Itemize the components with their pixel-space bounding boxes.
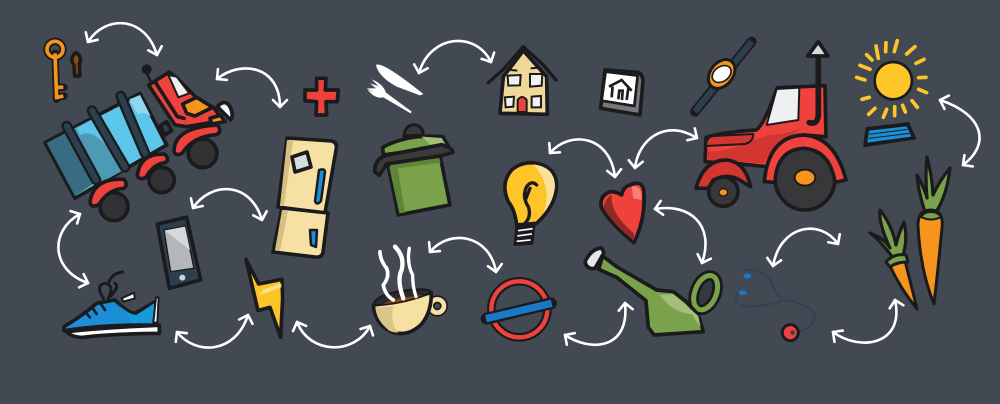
icon: keys [47, 41, 80, 99]
arrow: stethoscope to small carrot [833, 300, 896, 343]
tractor exhaust [809, 55, 818, 123]
truck connector [160, 122, 172, 135]
icon: watch [695, 42, 752, 112]
can spout head [585, 248, 604, 269]
pot knob [404, 125, 423, 136]
arrow: phone to fridge [193, 189, 262, 220]
truck cab [145, 68, 151, 82]
arrow: knife to house [419, 41, 491, 73]
tractor window [767, 88, 799, 125]
truck container [45, 93, 167, 198]
icon: stethoscope [736, 270, 815, 341]
arrow: heart to tractor [635, 130, 697, 168]
arrow: truck to plus [217, 68, 280, 107]
icon: plus cross [305, 78, 338, 115]
tractor fenders [764, 135, 846, 182]
icon: sneaker [64, 272, 159, 337]
pot lid [383, 136, 448, 155]
can body [599, 256, 703, 335]
icon: watering can [585, 248, 722, 335]
cup handle [431, 299, 444, 313]
icon: fridge [273, 138, 336, 257]
tractor body [705, 86, 826, 167]
icon: small carrot [870, 210, 917, 309]
icon: large carrot [917, 157, 950, 304]
tractor front wheel [709, 177, 738, 206]
arrow: stethoscope to carrot [773, 229, 838, 266]
arrow: heart to watering can [655, 208, 705, 263]
truck wheels [100, 139, 217, 221]
tractor rear wheel [775, 147, 835, 210]
cup body [373, 293, 431, 334]
solar panel [864, 123, 915, 146]
icon: smart home badge [601, 70, 643, 115]
icon: sun [857, 41, 927, 146]
pot rim [375, 145, 453, 175]
arrow: sneaker to bolt [177, 315, 248, 348]
icon: house [488, 47, 556, 114]
icon: green pot [375, 125, 453, 215]
arrow: sun to carrots [940, 100, 980, 165]
tractor hood panel [706, 134, 753, 146]
arrow: bolt to cup [297, 322, 370, 347]
coffee [373, 289, 431, 305]
truck fenders [90, 125, 220, 206]
pot body [388, 155, 450, 215]
arrow: truck to sneaker [58, 214, 88, 283]
icon: phone [157, 217, 201, 288]
arrow: keys to truck [88, 23, 157, 55]
arrow: bulb to heart [550, 139, 615, 177]
icon: lightning bolt [246, 259, 283, 337]
icon: tractor [696, 42, 846, 210]
arrow: roundel to watering can [565, 303, 625, 345]
icon: underground roundel [486, 281, 552, 337]
arrow: cup to roundel [430, 238, 496, 272]
icon: coffee cup [373, 247, 444, 334]
icon: truck [45, 64, 232, 221]
icon: heart [601, 183, 644, 243]
bulb base [513, 224, 536, 246]
truck ribs [67, 96, 145, 180]
icon: knife and fork [367, 64, 423, 113]
steam [380, 247, 416, 300]
icon: light bulb [505, 163, 557, 246]
can handle [689, 272, 722, 313]
